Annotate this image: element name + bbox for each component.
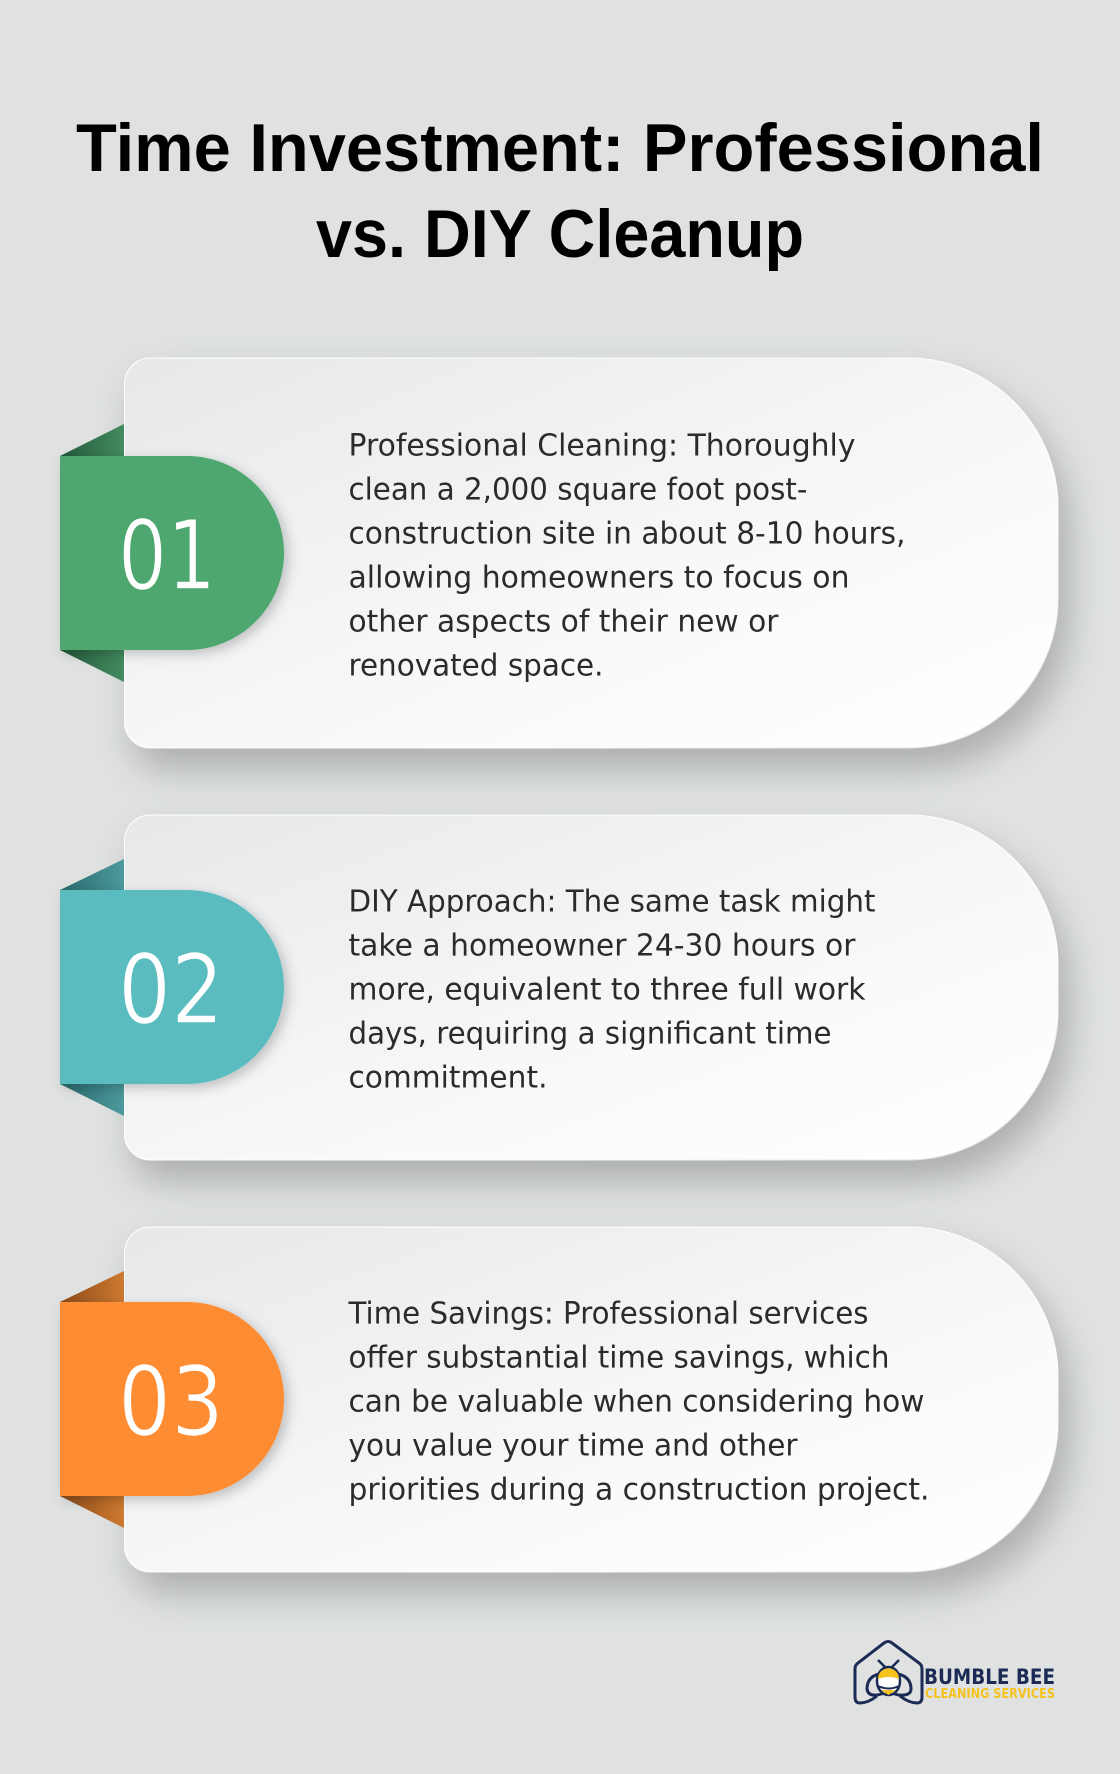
- number 01: 01: [118, 500, 216, 612]
- text 02: take a homeowner 24-30 hours or: [348, 928, 856, 964]
- fold top 03: [60, 1271, 124, 1302]
- fold top 01: [60, 424, 124, 456]
- text 02: more, equivalent to three full work: [348, 972, 866, 1008]
- number 03: 03: [118, 1346, 224, 1458]
- text 03: offer substantial time savings, which: [348, 1340, 890, 1376]
- text 01: construction site in about 8-10 hours,: [348, 516, 906, 552]
- card 01 background: [124, 358, 1058, 748]
- panel: step 02 DIY approach: [60, 815, 1058, 1160]
- fold bottom 01: [60, 650, 124, 682]
- number tab 03: [60, 1302, 284, 1496]
- brand tagline: CLEANING SERVICES: [925, 1686, 1055, 1702]
- card 02 background: [124, 815, 1058, 1160]
- text 03: you value your time and other: [348, 1428, 798, 1464]
- fold bottom 02: [60, 1084, 124, 1116]
- fold top 02: [60, 859, 124, 890]
- card 03 background: [124, 1227, 1058, 1572]
- number tab 02: [60, 890, 284, 1084]
- text 01: allowing homeowners to focus on: [348, 560, 850, 596]
- title: Time Investment: Professional: [76, 110, 1044, 186]
- text 03: Time Savings: Professional services: [348, 1296, 868, 1332]
- number tab 01: [60, 456, 284, 650]
- number 02: 02: [118, 934, 224, 1046]
- panel: step 01 professional cleaning: [60, 358, 1058, 748]
- title: vs. DIY Cleanup: [316, 196, 804, 272]
- text 01: renovated space.: [348, 648, 604, 684]
- text 03: priorities during a construction project.: [348, 1472, 930, 1508]
- text 03: can be valuable when considering how: [348, 1384, 924, 1420]
- text 01: clean a 2,000 square foot post-: [348, 472, 808, 508]
- brand name: BUMBLE BEE: [924, 1665, 1055, 1689]
- logo: Bumble Bee Cleaning Services: [855, 1642, 1055, 1703]
- text 01: [348, 428, 906, 684]
- text 02: DIY Approach: The same task might: [348, 884, 876, 920]
- text 02: commitment.: [348, 1060, 548, 1096]
- panel: step 03 time savings: [60, 1227, 1058, 1572]
- text 02: [348, 884, 876, 1096]
- text 01: other aspects of their new or: [348, 604, 779, 640]
- icon: house outline with bee: [855, 1642, 922, 1703]
- text 02: days, requiring a significant time: [348, 1016, 832, 1052]
- text 01: Professional Cleaning: Thoroughly: [348, 428, 856, 464]
- text 03: [348, 1296, 929, 1508]
- fold bottom 03: [60, 1496, 124, 1528]
- title: [76, 110, 1044, 272]
